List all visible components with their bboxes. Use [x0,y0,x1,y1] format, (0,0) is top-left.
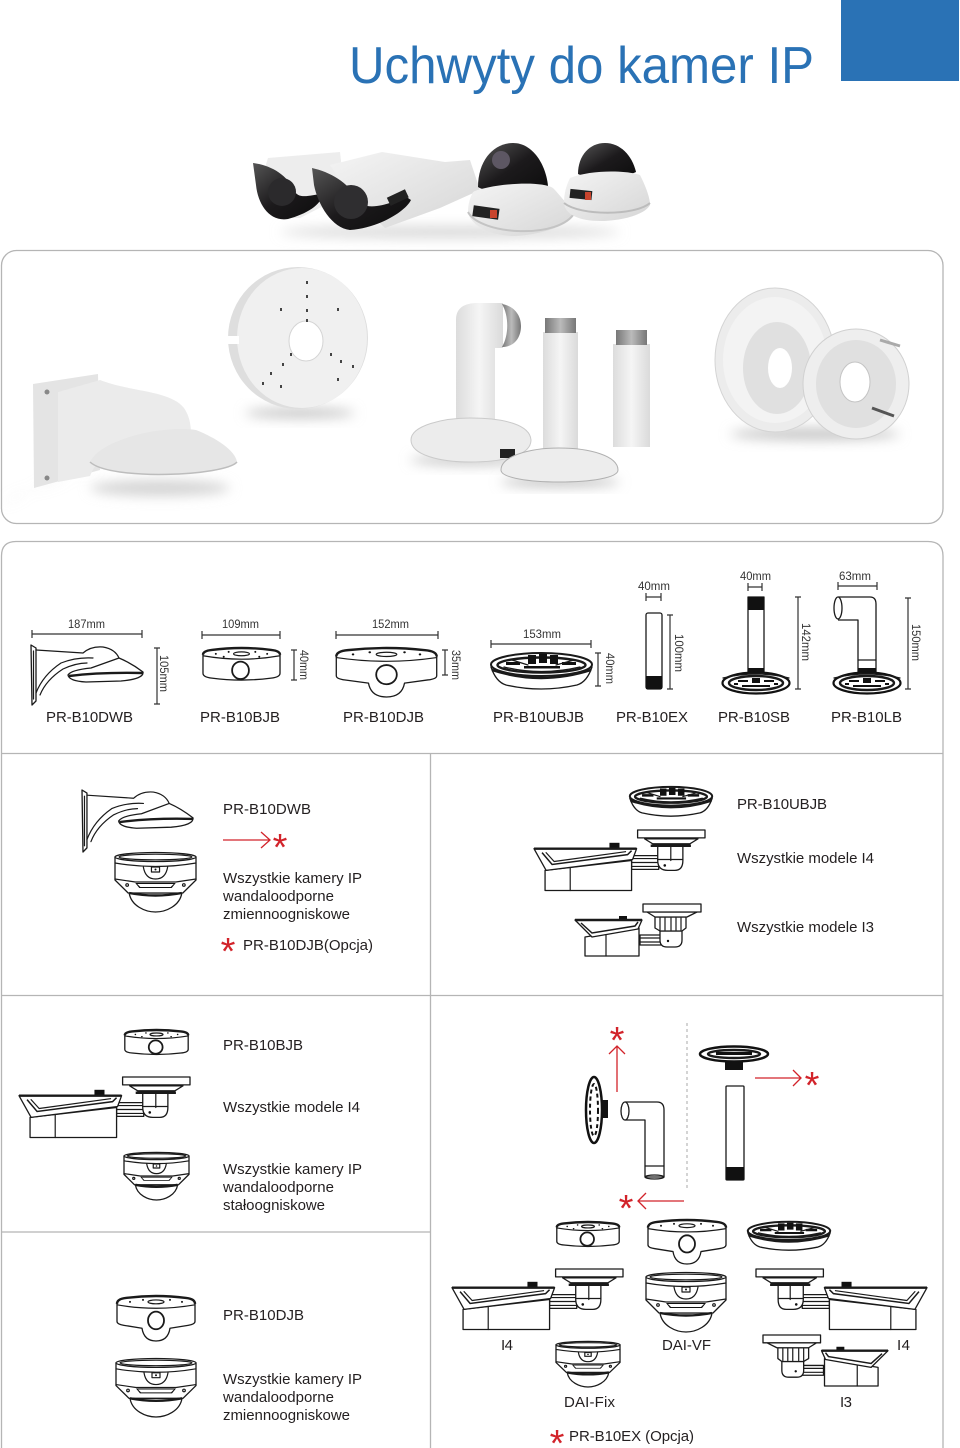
panel: PR-B10BJB compatibility: stałoogniskowe [223,1197,325,1214]
photo: round junction plate [227,267,368,418]
PR-B10LB drawing with dimensions [834,571,921,694]
panel: PR-B10UBJB compatibility: PR-B10UBJB [737,796,827,813]
bullet camera I3 [763,1335,888,1386]
panel: PR-B10DWB compatibility: wandaloodporne [222,888,334,905]
title: Uchwyty do kamer IP [349,37,814,95]
junction boxes row [557,1220,830,1264]
panel: PR-B10DJB compatibility: zmiennoogniskowe [223,1407,350,1424]
bullet camera I4 right [756,1269,927,1330]
divider lines [2,754,943,1448]
camera labels: I4 [897,1337,910,1354]
PR-B10EX drawing with dimensions: 100mm [672,634,684,672]
PR-B10BJB drawing with dimensions: 40mm [297,650,309,680]
photo: IP cameras [253,143,650,238]
PR-B10LB drawing with dimensions: 63mm [839,571,871,583]
photo: straight pole [500,318,620,486]
panel: PR-B10DWB compatibility [82,790,373,973]
photo: junction boxes [715,288,909,440]
PR-B10EX drawing with dimensions [638,581,684,689]
photo: L-shaped pole [410,303,531,465]
wall bracket drawing with dimensions [31,619,169,705]
PR-B10SB drawing with dimensions [722,571,811,694]
panel: PR-B10UBJB compatibility [534,787,874,956]
left arrow with option mark [619,1188,684,1230]
PR-B10DJB drawing with dimensions: 35mm [449,650,461,680]
photo: pole extension [613,330,650,447]
panel: PR-B10DWB compatibility: zmiennoogniskowe [223,906,350,923]
camera labels [501,1337,910,1411]
model names row: PR-B10EX [616,709,688,726]
option note: PR-B10EX (Opcja) [569,1428,694,1445]
PR-B10SB drawing with dimensions: 142mm [799,623,811,661]
model names row: PR-B10SB [718,709,790,726]
panel: PR-B10UBJB compatibility: Wszystkie modele I4 [737,850,874,867]
model names row: PR-B10LB [831,709,902,726]
panel: technical drawings frame [2,542,943,1448]
panel: PR-B10UBJB compatibility: Wszystkie modele I3 [737,919,874,936]
panel: PR-B10DWB compatibility: * [273,827,288,869]
left arrow with option mark: * [619,1188,634,1230]
panel: PR-B10BJB compatibility: Wszystkie modele I4 [223,1099,360,1116]
PR-B10BJB drawing with dimensions [202,619,309,680]
panel: PR-B10BJB compatibility: PR-B10BJB [223,1037,303,1054]
PR-B10UBJB drawing with dimensions: 40mm [603,653,615,684]
panel: PR-B10DJB compatibility: Wszystkie kamery IP [223,1371,362,1388]
straight pole assembly: * [805,1065,820,1107]
camera labels: I4 [501,1337,513,1354]
PR-B10LB drawing with dimensions: 150mm [909,624,921,661]
panel: PR-B10DWB compatibility: * [221,931,236,973]
panel: PR-B10BJB compatibility [19,1030,362,1214]
wall bracket drawing with dimensions: 187mm [68,619,105,631]
model names row: PR-B10DWB [46,709,133,726]
option note [550,1423,694,1448]
model names row [46,709,902,726]
PR-B10DJB drawing with dimensions [336,619,461,697]
photo: wall bracket [2,374,237,505]
panel: product photos [2,250,943,524]
panel: PR-B10DJB compatibility: wandaloodporne [222,1389,334,1406]
camera labels: I3 [840,1394,852,1411]
straight pole assembly [700,1046,820,1180]
PR-B10SB drawing with dimensions: 40mm [740,571,771,583]
blue corner block [841,0,959,81]
panel: pole mount compatibility [452,1020,927,1448]
panel: PR-B10DJB compatibility [116,1296,362,1424]
dome camera DAI-Fix [556,1341,620,1387]
PR-B10UBJB drawing with dimensions [491,629,615,689]
PR-B10BJB drawing with dimensions: 109mm [222,619,259,631]
panel: PR-B10DJB compatibility: PR-B10DJB [223,1307,304,1324]
model names row: PR-B10DJB [343,709,424,726]
PR-B10DJB drawing with dimensions: 152mm [372,619,409,631]
model names row: PR-B10UBJB [493,709,584,726]
model names row: PR-B10BJB [200,709,280,726]
bullet camera I4 left [452,1269,623,1330]
camera labels: DAI-VF [662,1337,711,1354]
panel: PR-B10BJB compatibility: Wszystkie kamery IP [223,1161,362,1178]
L-bracket assembly [586,1020,664,1179]
panel: PR-B10BJB compatibility: wandaloodporne [222,1179,334,1196]
camera labels: DAI-Fix [564,1394,616,1411]
L-bracket assembly: * [610,1020,625,1062]
panel: PR-B10DWB compatibility: Wszystkie kamery IP [223,870,362,887]
PR-B10EX drawing with dimensions: 40mm [638,581,670,593]
panel: PR-B10DWB compatibility: PR-B10DWB [223,801,311,818]
dome camera DAI-VF [646,1272,726,1332]
panel: PR-B10DWB compatibility: PR-B10DJB(Opcja) [243,937,373,954]
wall bracket drawing with dimensions: 105mm [157,655,169,692]
PR-B10UBJB drawing with dimensions: 153mm [523,629,561,641]
separator [686,1023,688,1190]
